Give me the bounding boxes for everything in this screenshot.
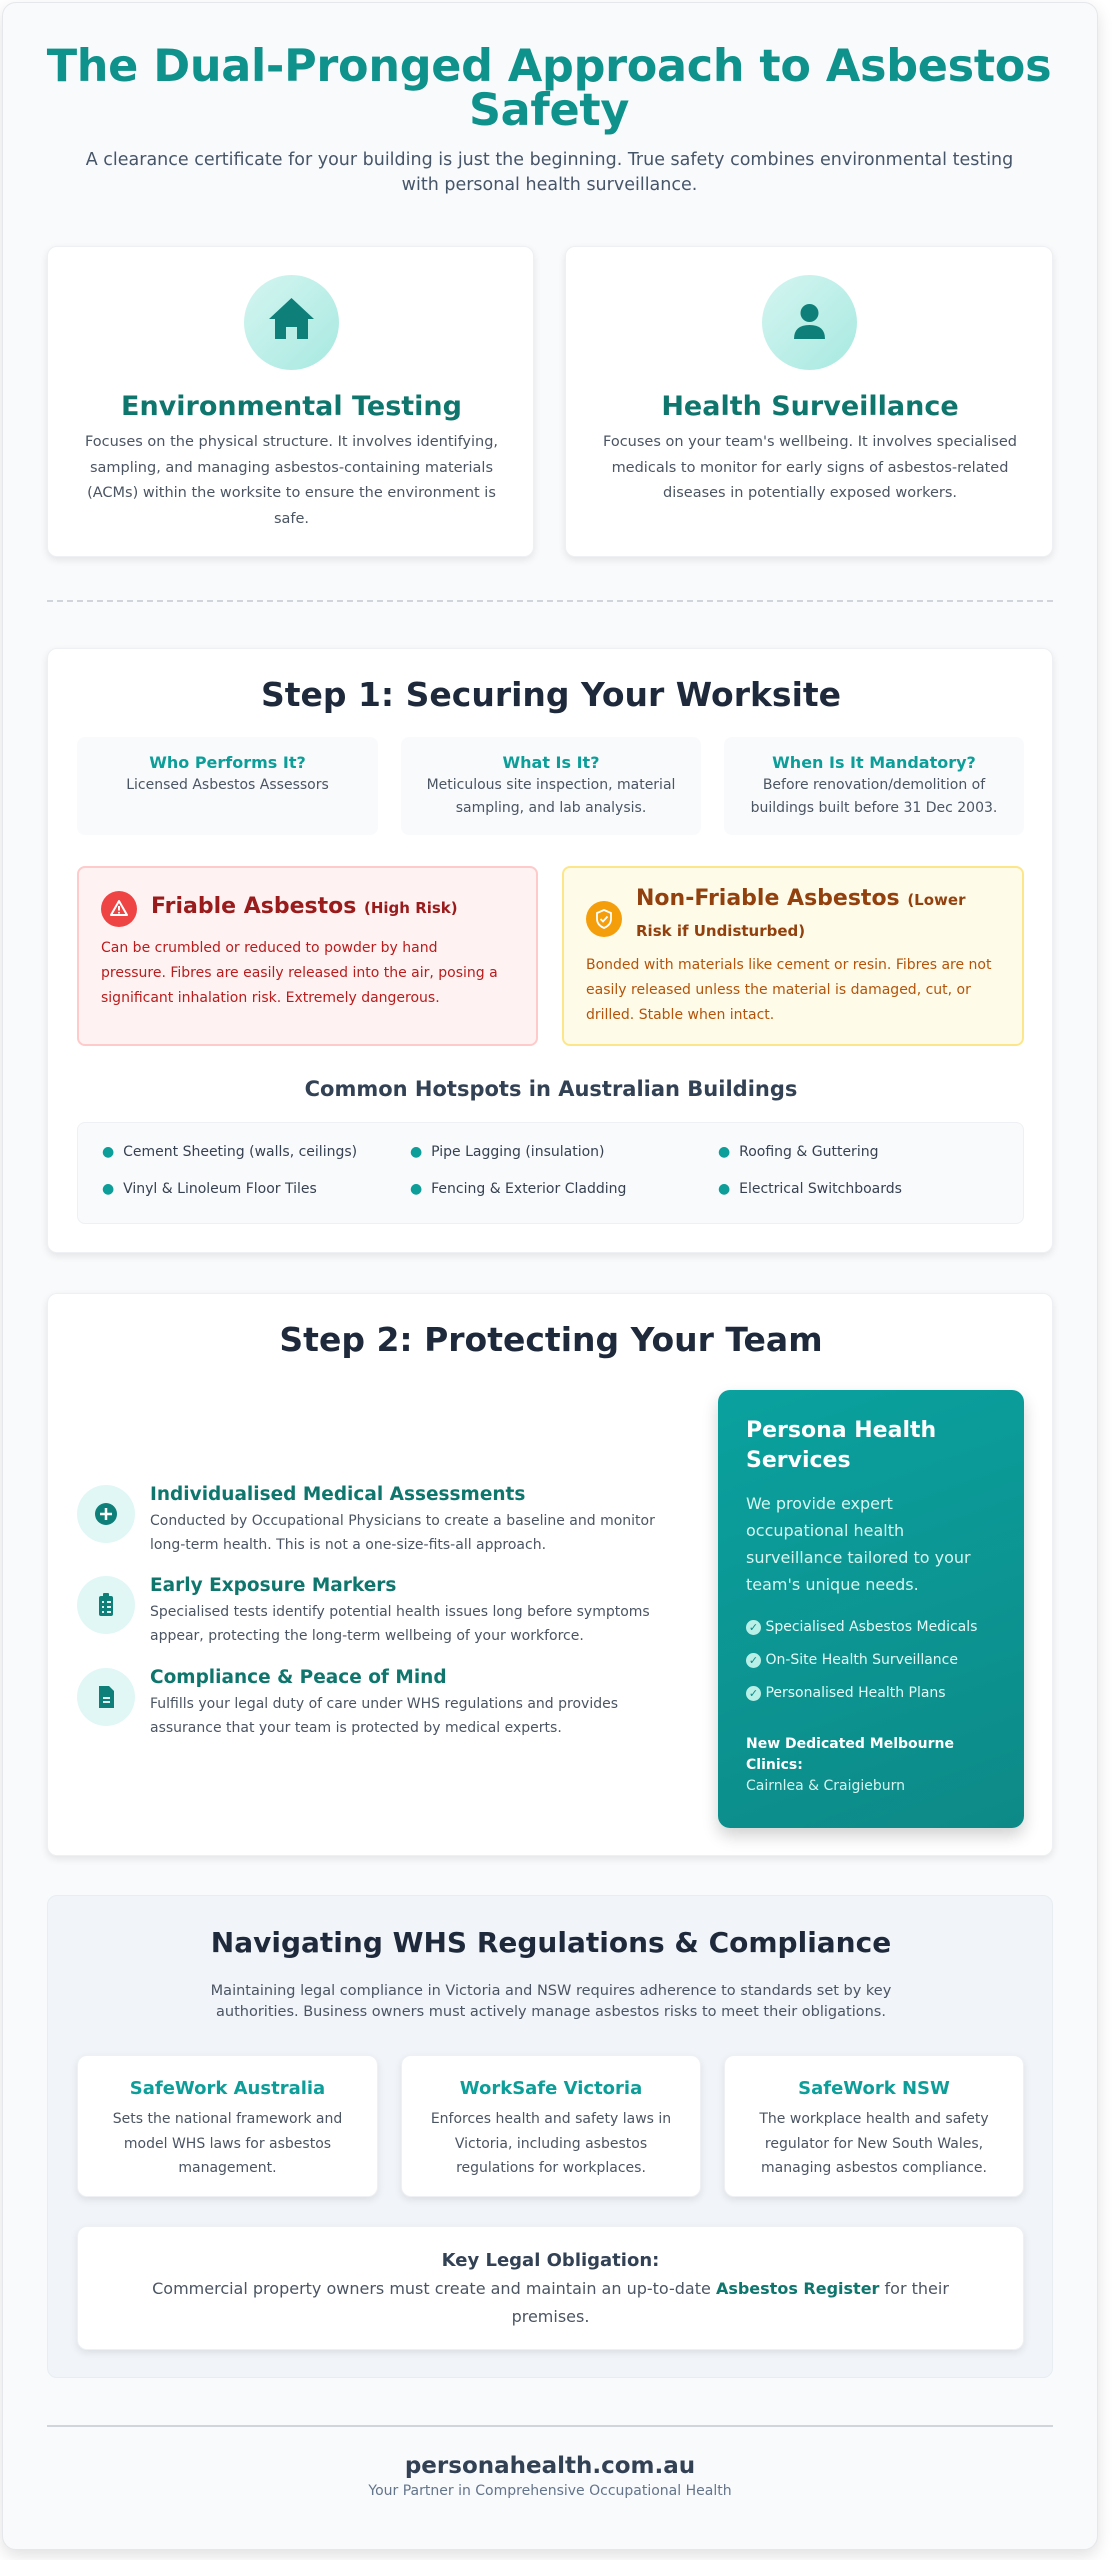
card: safework nsw — [724, 2055, 1024, 2197]
callout: persona health services: ✓ — [749, 1654, 758, 1667]
info: when: Before renovation/demolition of buildings built before 31 Dec 2003. — [751, 777, 997, 816]
callout: non-friable: Bonded with materials like cement or resin. Fibres are not easily released unless the material is damaged, cut, or drilled. Stable when intact. — [586, 957, 991, 1023]
heading: Step 2: Protecting Your Team — [279, 1320, 823, 1359]
callout: friable — [77, 866, 538, 1046]
info: who: Who Performs It? — [149, 753, 306, 772]
item: compliance: Compliance & Peace of Mind — [150, 1667, 447, 1688]
subtitle: A clearance certificate for your building is just the beginning. True safety combines environmental testing with personal health surveillance. — [86, 150, 1013, 195]
heading: Environmental Testing — [121, 391, 462, 422]
card: safework nsw: The workplace health and safety regulator for New South Wales, managing asbestos compliance. — [759, 2111, 989, 2176]
info: what: What Is It? — [502, 753, 599, 772]
callout: persona health services: Cairnlea & Craigieburn — [746, 1778, 905, 1794]
icon: warning — [101, 891, 137, 927]
card: safework australia: SafeWork Australia — [130, 2078, 325, 2099]
icon: person — [762, 275, 857, 370]
item: medical assessments — [77, 1484, 655, 1553]
callout: persona health services: ✓ — [749, 1621, 758, 1634]
item: medical assessments: Conducted by Occupational Physicians to create a baseline and monitor long-term health. This is not a one-size-fits-all approach. — [150, 1513, 655, 1553]
info: when: When Is It Mandatory? — [772, 753, 976, 772]
callout: key legal obligation: Commercial property owners must create and maintain an up-to-date Asbestos Register for their premises. — [152, 2279, 949, 2326]
info: who — [77, 737, 378, 835]
panel: health surveillance — [565, 246, 1053, 557]
card: safework australia: Sets the national framework and model WHS laws for asbestos management. — [113, 2111, 342, 2176]
hotspot list: ● Pipe Lagging (insulation) — [410, 1144, 604, 1160]
heading: Health Surveillance — [661, 391, 959, 422]
panel: environmental testing — [47, 246, 534, 557]
item: compliance — [77, 1667, 618, 1736]
hotspot list: ● Roofing & Guttering — [718, 1144, 878, 1160]
callout: persona health services: On-Site Health Surveillance — [765, 1652, 958, 1668]
footer: personahealth.com.au — [405, 2453, 695, 2479]
callout: persona health services: Persona Health Services — [746, 1418, 936, 1473]
hotspot list: ● Fencing & Exterior Cladding — [410, 1181, 626, 1197]
heading: hotspots: Common Hotspots in Australian Buildings — [305, 1077, 797, 1101]
item: medical assessments: Individualised Medical Assessments — [150, 1484, 525, 1505]
icon: shield — [586, 901, 622, 937]
card: safework australia — [77, 2055, 378, 2197]
info: when — [724, 737, 1024, 835]
text: Focuses on your team's wellbeing. It involves specialised medicals to monitor for early signs of asbestos-related diseases in potentially exposed workers. — [603, 434, 1017, 501]
item: compliance: Fulfills your legal duty of care under WHS regulations and provides assurance that your team is protected by medical experts. — [150, 1696, 618, 1736]
heading: Navigating WHS Regulations & Compliance — [211, 1926, 891, 1959]
callout: persona health services — [718, 1390, 1024, 1828]
icon: house — [244, 275, 339, 370]
hotspot list: ● Electrical Switchboards — [718, 1181, 902, 1197]
callout: persona health services: New Dedicated Melbourne Clinics: — [746, 1736, 954, 1773]
callout: friable: Can be crumbled or reduced to powder by hand pressure. Fibres are easily released into the air, posing a significant inhalation risk. Extremely dangerous. — [101, 940, 498, 1006]
panel: WHS regulations — [47, 1895, 1053, 2378]
item: exposure markers: Early Exposure Markers — [150, 1575, 396, 1596]
item: exposure markers — [77, 1575, 650, 1644]
footer: Your Partner in Comprehensive Occupational Health — [368, 2483, 732, 2499]
hotspot list: ● Vinyl & Linoleum Floor Tiles — [102, 1181, 317, 1197]
footer — [368, 2453, 732, 2499]
callout: persona health services: ✓ — [749, 1687, 758, 1700]
item: exposure markers: Specialised tests identify potential health issues long before symptoms appear, protecting the long-term wellbeing of your workforce. — [150, 1604, 650, 1644]
callout: friable: Friable Asbestos (High Risk) — [151, 894, 458, 919]
info: what: Meticulous site inspection, material sampling, and lab analysis. — [427, 777, 675, 816]
text: Focuses on the physical structure. It involves identifying, sampling, and managing asbestos-containing materials (ACMs) within the worksite to ensure the environment is safe. — [85, 434, 498, 526]
card: worksafe victoria: Enforces health and safety laws in Victoria, including asbestos regulations for workplaces. — [431, 2111, 671, 2176]
callout: persona health services: Specialised Asbestos Medicals — [765, 1619, 977, 1635]
card: worksafe victoria — [401, 2055, 701, 2197]
panel: step 2 — [47, 1293, 1053, 1856]
callout: non-friable: Non-Friable Asbestos (Lower Risk if Undisturbed) — [636, 886, 965, 940]
card: safework nsw: SafeWork NSW — [798, 2078, 950, 2099]
panel: step 1 — [47, 648, 1053, 1253]
info: who: Licensed Asbestos Assessors — [126, 777, 329, 793]
text: Maintaining legal compliance in Victoria and NSW requires adherence to standards set by key authorities. Business owners must actively manage asbestos risks to meet their obligations. — [211, 1983, 891, 2020]
card: worksafe victoria: WorkSafe Victoria — [460, 2078, 642, 2099]
callout: key legal obligation: Key Legal Obligation: — [442, 2250, 659, 2271]
title: The Dual-Pronged Approach to Asbestos Safety — [47, 41, 1051, 136]
heading: Step 1: Securing Your Worksite — [261, 675, 841, 714]
callout: persona health services: We provide expert occupational health surveillance tailored to your team's unique needs. — [746, 1494, 971, 1594]
callout: non-friable — [562, 866, 1024, 1046]
hotspot list: ● Cement Sheeting (walls, ceilings) — [102, 1144, 357, 1160]
callout: persona health services: Personalised Health Plans — [765, 1685, 946, 1701]
hotspot list — [77, 1122, 1024, 1224]
info: what — [401, 737, 701, 835]
callout: key legal obligation — [77, 2226, 1024, 2350]
